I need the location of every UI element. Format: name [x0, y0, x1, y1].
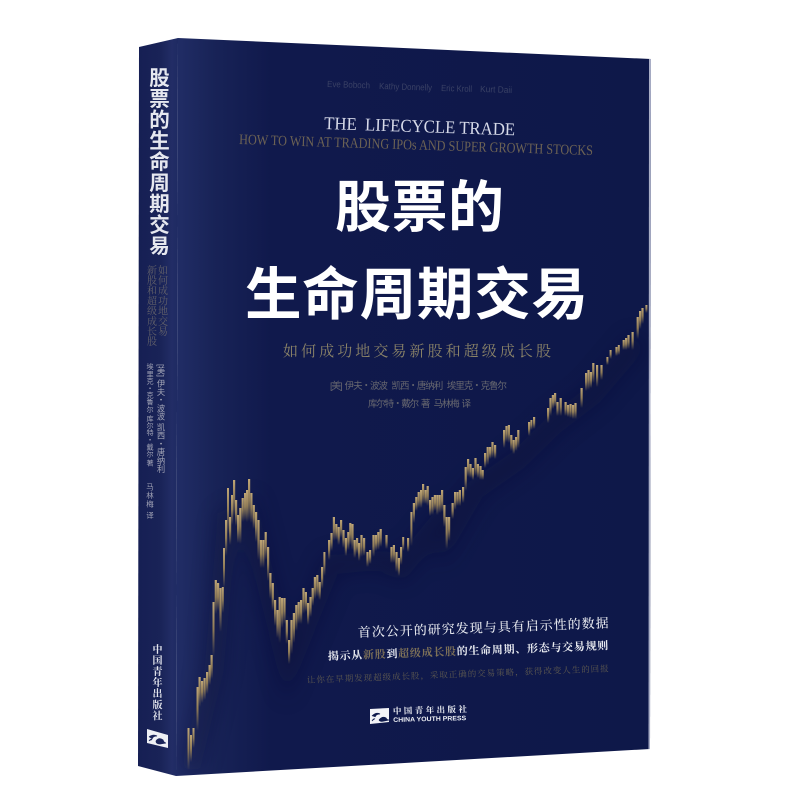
- spine authors: 马林梅 译: [145, 483, 154, 520]
- Chinese author credits: [330, 380, 507, 410]
- author names in English: Eric Kroll: [441, 83, 472, 94]
- line chart: gold price bars: [188, 305, 647, 770]
- spine authors: 埃里克・克鲁尔 库尔特・戴尔 著: [146, 362, 154, 467]
- slogan: line 2: 揭示从新股到超级成长股的生命周期、形态与交易规则: [328, 638, 609, 663]
- publisher name: 中国青年出版社: [393, 704, 468, 716]
- publisher logo and name: [370, 704, 468, 724]
- book: 3D cover and spine: [138, 38, 651, 776]
- author names in English: [327, 79, 512, 95]
- author names in English: Kurt Daii: [480, 84, 512, 95]
- main title: 生命周期交易: [245, 263, 588, 326]
- icon: publisher logo: [370, 708, 389, 724]
- Chinese subtitle: 如何成功地交易新股和超级成长股: [283, 342, 551, 360]
- main title: [245, 176, 588, 326]
- spine publisher name: 中国青年出版社: [150, 643, 162, 722]
- Chinese author credits: 库尔特・戴尔 著 马林梅 译: [368, 398, 471, 410]
- spine subtitle: 如何成功地交易: [156, 264, 168, 337]
- spine subtitle: 新股和超级成长股: [144, 265, 156, 347]
- author names in English: Eve Boboch: [327, 79, 370, 90]
- icon: spine publisher logo: [147, 729, 168, 748]
- publisher name: CHINA YOUTH PRESS: [393, 715, 467, 724]
- spine authors: [145, 362, 166, 520]
- Chinese author credits: [美] 伊夫・波波 凯西・唐纳利 埃里克・克鲁尔: [330, 380, 507, 392]
- slogan: line 1: 首次公开的研究发现与具有启示性的数据: [358, 615, 609, 640]
- English subtitle: HOW TO WIN AT TRADING IPOs AND SUPER GROWTH STOCKS: [239, 132, 593, 159]
- cover right edge: [648, 59, 651, 749]
- English title: THE LIFECYCLE TRADE: [324, 113, 515, 139]
- author names in English: Kathy Donnelly: [379, 81, 433, 93]
- main title: 股票的: [335, 176, 504, 239]
- publisher name: [393, 704, 468, 724]
- spine title: 股票的生命周期交易: [146, 67, 170, 256]
- spine authors: [美] 伊夫・波波 凯西・唐纳利: [156, 364, 166, 473]
- panel: spine: [138, 38, 178, 776]
- slogan: line 3: 让你在早期发现超级成长股，采取正确的交易策略，获得改变人生的回报: [307, 663, 609, 686]
- panel: front cover: [176, 38, 651, 776]
- spine subtitle: [144, 264, 168, 347]
